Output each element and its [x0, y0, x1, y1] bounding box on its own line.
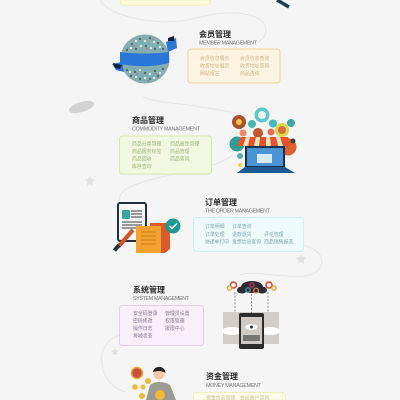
panel: member management items — [188, 49, 280, 83]
icon: order document and pen — [114, 203, 180, 253]
heading: commodity management: 商品管理 — [132, 115, 164, 125]
panel: commodity management items: 商品管理 — [170, 148, 190, 155]
panel: member management items: 网站留言 — [200, 70, 220, 77]
icon: partial magnifier — [277, 0, 289, 7]
decoration: star left — [85, 176, 95, 186]
subheading: commodity management: COMMODITY MANAGEMENT — [132, 126, 201, 132]
panel: member management items: 收货地址展示 — [200, 62, 229, 70]
panel: system management items: 权限管理 — [165, 318, 185, 324]
panel: member management items: 收货地址查询 — [240, 62, 269, 70]
icon: online shop laptop — [230, 108, 296, 173]
panel: previous section, yellow box — [120, 0, 210, 5]
subheading: order management: THE ORDER MANAGEMENT — [205, 208, 271, 214]
panel: order management items: 快递单打印 — [205, 238, 229, 246]
ribbon flag right — [166, 38, 177, 52]
panel: commodity management items: 商品回收 — [132, 156, 152, 162]
panel: commodity management items: 商品服务标签 — [132, 148, 161, 155]
panel: commodity management items: 商品查询 — [170, 156, 190, 162]
icon: man with coins and clock — [132, 367, 176, 400]
heading: money management: 资金管理 — [206, 371, 238, 381]
section: order management — [114, 197, 304, 253]
panel: order management items: 订单处理 — [205, 231, 225, 238]
panel: member management items: 商品咨询 — [240, 70, 260, 77]
section: money management — [132, 367, 286, 400]
panel: commodity management items: 商品分类管理 — [132, 140, 161, 148]
subheading: system management: SYSTEM MANAGEMENT — [133, 296, 190, 302]
heading: order management: 订单管理 — [205, 197, 237, 207]
panel: money management items — [194, 392, 286, 400]
panel: commodity management items: 库存查询 — [132, 163, 152, 170]
heading: system management: 系统管理 — [133, 284, 165, 294]
panel: order management items: 退款退货 — [232, 231, 252, 238]
section: commodity management — [120, 108, 296, 174]
decoration: star lower left — [111, 347, 119, 355]
panel: order management items: 发票信息查询 — [232, 238, 261, 246]
subheading: member management: MEMBER MANAGEMENT — [199, 40, 258, 46]
icon: globe with blue ribbon — [112, 34, 177, 84]
ribbon flag left — [112, 62, 124, 72]
panel: commodity management items: 商品属性管理 — [170, 140, 199, 148]
heading: member management: 会员管理 — [199, 29, 231, 39]
panel: order management items — [194, 218, 304, 252]
panel: order management items: 订单查询 — [232, 223, 252, 230]
panel: system management items: 操作日志 — [133, 325, 153, 332]
panel: member management items: 会员信息展示 — [200, 55, 229, 62]
decoration: star right — [296, 254, 306, 264]
subheading: money management: MONEY MANAGEMENT — [206, 383, 262, 389]
panel: order management items: 订单明细 — [205, 223, 225, 230]
panel: member management items: 会员信息查询 — [240, 55, 269, 62]
decoration: grey ellipse — [68, 98, 95, 116]
panel: system management items: 将城状态 — [133, 332, 153, 340]
panel: order management items: 评论管理 — [264, 231, 284, 238]
ribbon band — [120, 52, 169, 66]
panel: order management items: 商品销售报表 — [264, 238, 293, 246]
panel: system management items — [120, 306, 204, 346]
connecting curve — [100, 0, 322, 392]
panel: system management items: 安全码登录 — [133, 310, 158, 317]
panel: system management items: 密码修改 — [133, 318, 153, 324]
section: member management — [112, 29, 280, 84]
icon: cloud and smartphone — [222, 281, 280, 349]
panel: commodity management items — [120, 136, 212, 174]
panel: system management items: 管理员设置 — [165, 310, 190, 317]
section: system management — [120, 281, 280, 349]
panel: system management items: 援限中心 — [165, 325, 185, 332]
